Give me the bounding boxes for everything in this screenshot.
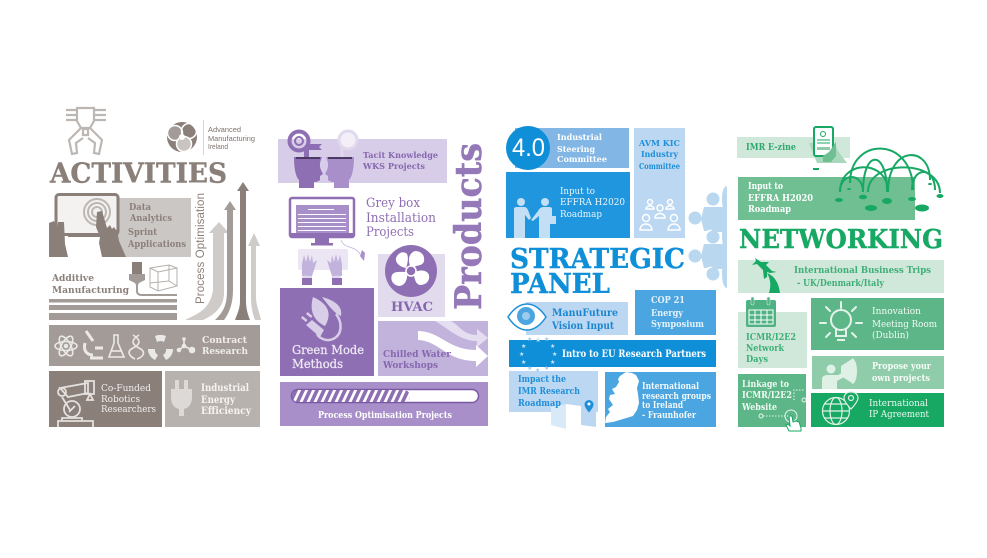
text: intro to eu research partners: Intro to EU Research Partners (562, 349, 706, 360)
icon: people network cluster (688, 186, 727, 288)
chart: rising arrows (185, 182, 261, 320)
heading: panel: PANEL (510, 269, 610, 300)
text: industrial energy efficiency: Energy (201, 394, 236, 406)
text: impact the imr research roadmap: Roadmap (518, 399, 561, 409)
text: input to effra networking (748, 182, 813, 215)
text: data analytics, sprint applications (127, 203, 186, 250)
panel: products (278, 131, 490, 426)
panel: innovation meeting room (811, 298, 944, 350)
panel: process optimisation projects (280, 382, 488, 426)
panel: effra roadmap (506, 172, 630, 238)
text: additive manufacturing: Additive (51, 274, 94, 284)
text: international business trips: International Business Trips (794, 266, 931, 276)
text: tacit knowledge: WKS Projects (362, 162, 425, 172)
text: icmr network days: Network (746, 344, 785, 354)
panel: strategic panel (506, 126, 727, 429)
heading: activities: ACTIVITIES (49, 158, 227, 190)
panel: tacit knowledge (278, 131, 447, 188)
icon: plane with trail (752, 258, 780, 293)
text: propose your own projects: Propose your (872, 362, 931, 372)
text: cop 21 energy symposium: Symposium (651, 320, 704, 330)
text: data analytics, sprint applications: Applications (127, 240, 186, 250)
panel: international research groups (605, 372, 716, 427)
text: innovation meeting room (872, 307, 937, 341)
icon: computer with hands on keyboard (290, 198, 365, 285)
heading: networking: NETWORKING (739, 225, 943, 255)
panel: networking (737, 127, 944, 431)
text: input to effra: Input to (560, 187, 595, 197)
icon: eu stars: ★ (550, 343, 555, 350)
panel: linkage to website (738, 374, 806, 431)
icon: eu stars: ★ (544, 336, 549, 343)
text: linkage to icmr website: ICMR/I2E2 (742, 391, 792, 401)
panel: data analytics (118, 198, 191, 257)
icon: fan (385, 245, 437, 297)
icon: eye (508, 304, 546, 330)
text: chilled water workshops (382, 349, 452, 371)
text: propose your own projects: own projects (872, 374, 930, 384)
text: data analytics, sprint applications: Analytics (129, 214, 172, 224)
text: manufuture vision input (551, 308, 618, 332)
icon: eu stars: ★ (535, 367, 540, 374)
panel: industrial steering committee (506, 126, 629, 170)
panel: effra roadmap networking (738, 177, 915, 220)
text: contract research (202, 336, 248, 357)
text: linkage to icmr website (741, 380, 792, 413)
panel: activities (49, 108, 261, 427)
text: chilled water workshops: Chilled Water (383, 349, 452, 360)
text: process optimisation: Process Optimisation (195, 193, 207, 304)
panel: impact roadmap (509, 371, 598, 429)
text: linkage to icmr website: Linkage to (742, 380, 789, 390)
icon: handshake (514, 198, 556, 238)
progress bar (292, 390, 478, 402)
text: data analytics, sprint applications: Data (129, 203, 151, 213)
icon: two heads sharing knowledge (290, 131, 357, 188)
icon: lightbulb (820, 302, 862, 340)
text: industrial energy efficiency: Industrial (201, 382, 249, 394)
text: grey box installation projects: Projects (366, 225, 414, 240)
text: input to effra (560, 187, 625, 220)
text: manufuture vision input: ManuFuture (552, 308, 618, 319)
text: input to effra: Roadmap (560, 210, 602, 220)
text: data analytics, sprint applications: Sprint (128, 228, 158, 238)
icon: advanced manufacturing logo (167, 122, 197, 152)
icon: eu stars: ★ (544, 365, 549, 372)
heading: strategic: STRATEGIC (510, 244, 685, 275)
text: input to effra networking: Roadmap (748, 205, 791, 215)
text: icmr network days: ICMR/I2E2 (746, 333, 796, 343)
text: chilled water workshops: Workshops (382, 360, 438, 371)
text: international ip agreement: IP Agreement (869, 410, 929, 420)
icon: plug (171, 380, 192, 416)
text: grey box installation projects: Grey box (366, 196, 421, 211)
text: industrial energy efficiency (201, 382, 252, 417)
text: international research groups: International (642, 382, 699, 392)
text: additive manufacturing: Manufacturing (52, 286, 130, 296)
panel: co-funded robotics (49, 371, 162, 427)
text: icmr network days (746, 333, 796, 365)
icon: eu stars: ★ (519, 351, 524, 358)
panel: green mode methods (280, 288, 374, 376)
text: avm kic industry committee: AVM KIC (638, 139, 680, 149)
text: industrial steering committee: Industrial (557, 133, 603, 143)
text: international ip agreement (869, 399, 929, 420)
panel: manufuture (508, 302, 628, 335)
text: linkage to icmr website: Website (741, 403, 777, 413)
text: industrial steering committee: Committee (557, 155, 608, 165)
text: co-funded robotics researchers (101, 384, 156, 415)
text: international research groups (642, 382, 711, 421)
icon: phone in hand (809, 127, 847, 170)
icon: flowing arrows (418, 321, 488, 367)
text: manufuture vision input: Vision Input (551, 321, 614, 332)
panel: contract research (49, 325, 260, 366)
text: industrial steering committee: Steering (557, 145, 595, 155)
text: international business trips: - UK/Denmark/Italy (797, 279, 885, 289)
panel: international ip agreement (811, 392, 944, 427)
panel: cop 21 (635, 290, 716, 335)
text: process optimisation projects: Process Optimisation Projects (318, 411, 452, 421)
text: innovation meeting room: Innovation (872, 307, 921, 317)
text: industrial steering committee (557, 133, 608, 165)
logo text: Manufacturing (208, 134, 255, 143)
text: innovation meeting room: Meeting Room (872, 320, 937, 330)
icon: tablet and hands (49, 194, 126, 257)
panel: network days (738, 297, 807, 368)
text: avm kic industry committee: Committee (639, 161, 680, 171)
panel: industrial energy efficiency (165, 371, 260, 427)
text: industrial energy efficiency: Efficiency (201, 405, 252, 417)
icon: folded map and pin (551, 400, 596, 429)
text: imr e-zine: IMR E-zine (746, 143, 796, 153)
text: co-funded robotics researchers: Co-Funded (101, 384, 151, 394)
panel: international business trips (738, 258, 944, 293)
text: tacit knowledge (362, 151, 439, 172)
icon: group of people (640, 200, 680, 230)
panel: avm kic (634, 128, 685, 238)
icon: person with megaphone (822, 358, 857, 389)
text: cop 21 energy symposium (651, 296, 704, 330)
text: propose your own projects (872, 362, 931, 384)
text: contract research: Contract (202, 336, 248, 346)
text: additive manufacturing (51, 274, 130, 296)
text: avm kic industry committee (638, 139, 680, 171)
icon: eu stars: ★ (550, 359, 555, 366)
icon: eu stars: ★ (527, 336, 532, 343)
text: avm kic industry committee: Industry (641, 150, 679, 160)
panel: propose your own projects (812, 356, 944, 389)
text: tacit knowledge: Tacit Knowledge (363, 151, 439, 161)
stripes: print layers (49, 299, 177, 320)
text: icmr network days: Days (746, 355, 768, 365)
text: international ip agreement: International (869, 399, 928, 409)
text: cop 21 energy symposium: COP 21 (651, 296, 685, 306)
text: impact the imr research roadmap: Impact the (518, 375, 566, 385)
icons: science symbols (55, 331, 194, 360)
logo text: Advanced (208, 125, 241, 134)
panel: imr e-zine (737, 127, 850, 170)
icon: robot arm (58, 381, 94, 427)
heading: products: Products (448, 143, 490, 310)
text: international research groups: research groups (642, 392, 711, 402)
icon: calendar (746, 297, 776, 327)
panel: eu research partners (509, 336, 716, 374)
logo text: Ireland (208, 142, 228, 151)
panel: hvac (378, 245, 445, 317)
text: innovation meeting room: (Dublin) (872, 330, 909, 341)
icon: 3d printer nozzle and cube (129, 262, 177, 295)
text: green mode methods (292, 342, 364, 371)
panel: chilled water workshops (378, 321, 488, 376)
text: international business trips (794, 266, 931, 289)
text: hvac: HVAC (391, 300, 433, 315)
text: green mode methods: Methods (292, 356, 343, 371)
icon: eu stars: ★ (527, 365, 532, 372)
icon: leaf and plug (301, 297, 341, 340)
text: international research groups: - Fraunhofer (642, 411, 696, 421)
icon: eu stars: ★ (521, 359, 526, 366)
text: green mode methods: Green Mode (292, 342, 364, 357)
text: grey box installation projects: Installation (366, 211, 437, 226)
text: contract research: Research (202, 347, 248, 357)
icon: eu stars: ★ (521, 343, 526, 350)
text: co-funded robotics researchers: Robotics (101, 395, 140, 405)
badge: 4.0: 4.0 (512, 134, 545, 162)
text: input to effra networking: Input to (748, 182, 783, 192)
icon: network domes (835, 149, 944, 212)
icon: eu stars: ★ (535, 336, 541, 344)
icon: globe and map pin (822, 392, 858, 424)
text: grey box installation projects (366, 196, 437, 240)
text: input to effra: EFFRA H2020 (560, 198, 625, 208)
text: cop 21 energy symposium: Energy (651, 309, 684, 319)
logo text (203, 120, 255, 155)
text: input to effra networking: EFFRA H2020 (748, 194, 813, 204)
icon: eu stars (519, 336, 557, 374)
text: international research groups: to Ireland (642, 401, 684, 411)
icon: cursor hand and link path (759, 390, 806, 431)
text: impact the imr research roadmap: IMR Research (518, 387, 580, 397)
text: co-funded robotics researchers: Researchers (101, 405, 156, 415)
icon: robot claw (66, 108, 106, 154)
icon: eu stars: ★ (552, 351, 557, 358)
text: impact the imr research roadmap (518, 375, 580, 409)
map: ireland (605, 372, 639, 423)
